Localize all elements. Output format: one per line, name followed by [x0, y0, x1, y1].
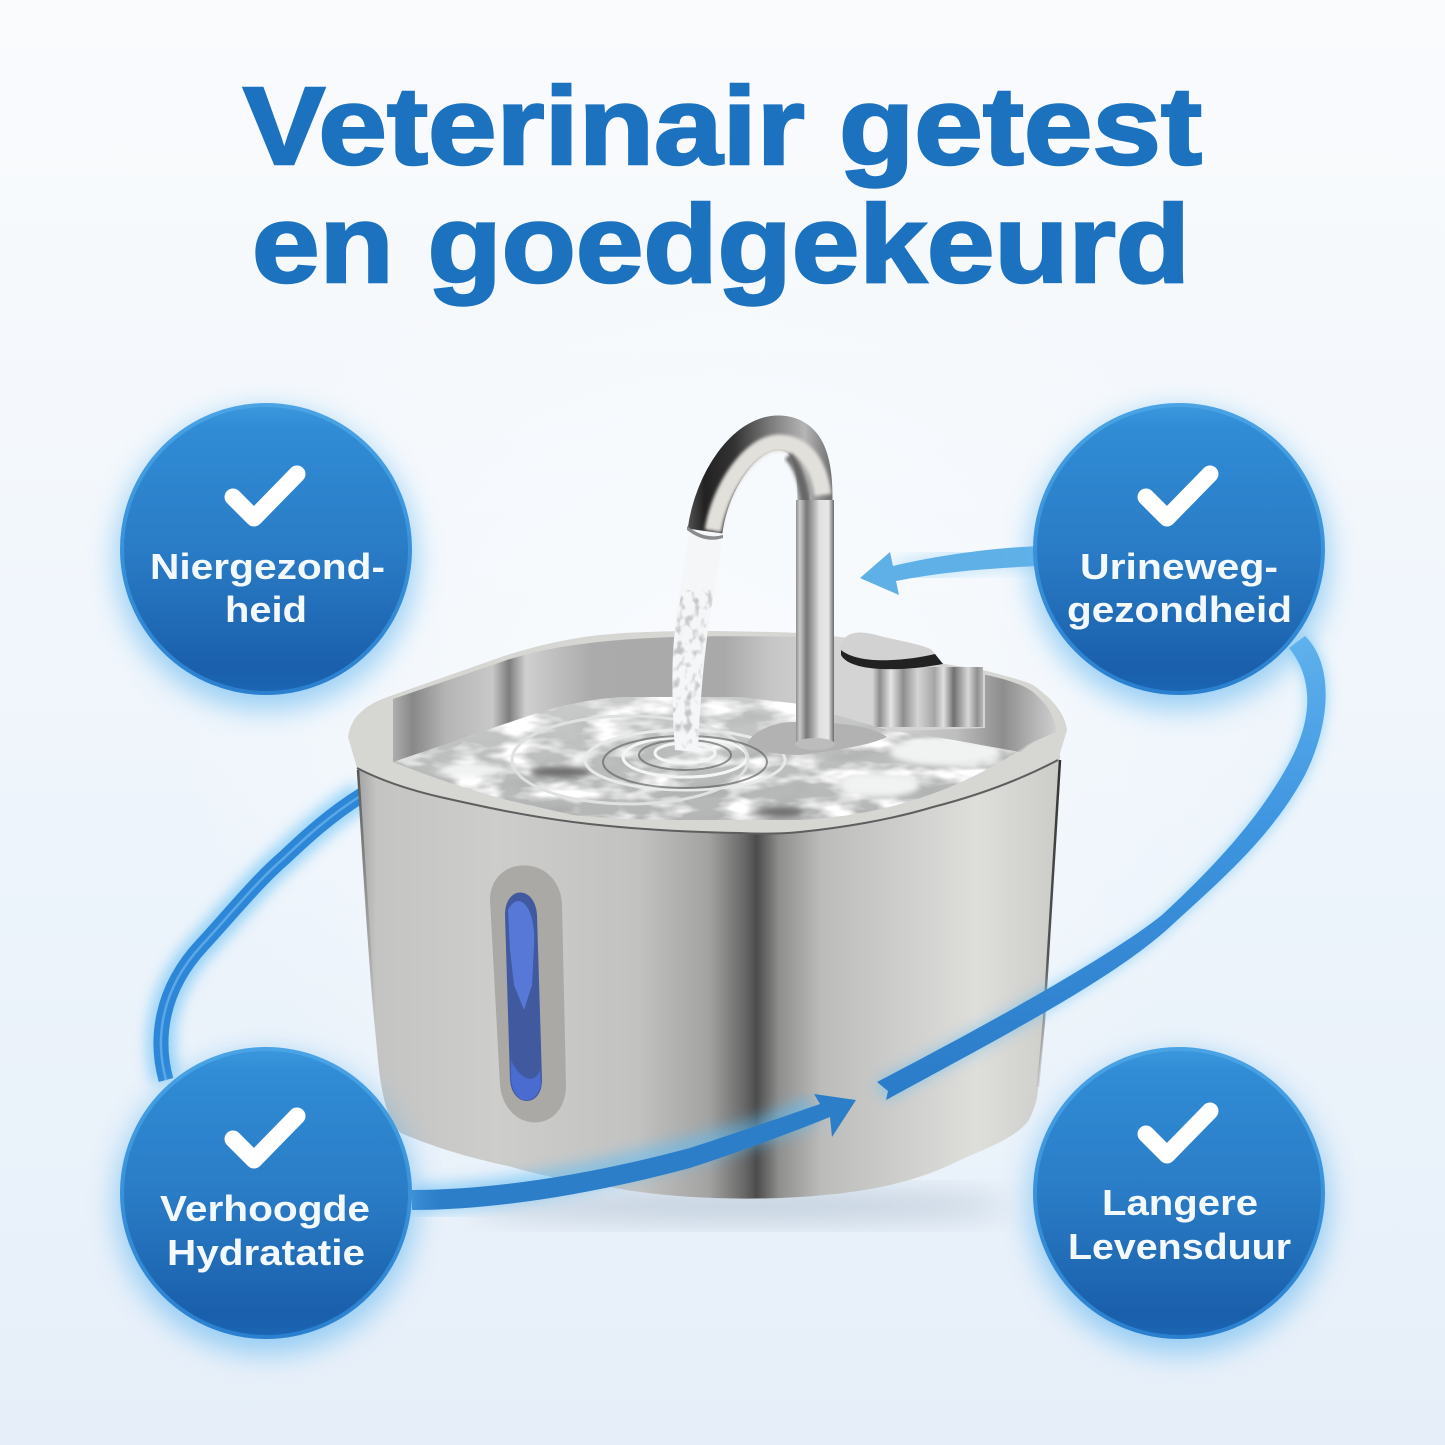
badge: Langere Levensduur: Langere: [1102, 1182, 1258, 1223]
body left edge shadow: [358, 770, 375, 1030]
arrow: top right pointing to faucet: [860, 546, 1040, 595]
dark reflections: [530, 766, 804, 817]
badge: Niergezondheid: Niergezond-: [150, 546, 385, 587]
water surface: [394, 697, 1032, 820]
badge: Urineweggezondheid: [1029, 405, 1329, 710]
faucet base disc: [747, 722, 887, 755]
faucet tube: [796, 500, 834, 743]
faucet collar: [795, 738, 835, 750]
outlet housing: [835, 655, 985, 732]
falling water stream: [672, 534, 722, 752]
icon: check: [1146, 474, 1210, 518]
rim lower edge line: [357, 760, 1058, 834]
faucet spout lip: [687, 526, 723, 540]
badge: Niergezondheid: heid: [225, 589, 307, 630]
title: Veterinair getest: [243, 65, 1202, 188]
arrow: left arc behind fountain: [161, 795, 362, 1080]
badge: Langere Levensduur: [1029, 1049, 1329, 1354]
large reflections on the right: [440, 738, 1000, 797]
badge: Verhoogde Hydratatie: [116, 1049, 416, 1354]
badge: Verhoogde Hydratatie: Verhoogde: [160, 1188, 370, 1229]
arrow: lower curve from Hydratatie to fountain: [412, 1094, 856, 1210]
fountain body: [357, 755, 1060, 1199]
icon: check: [233, 474, 297, 518]
rim: [348, 631, 1067, 834]
icon: check: [233, 1116, 297, 1160]
badge: Niergezondheid: [116, 405, 416, 710]
product: stainless steel fountain: [348, 433, 1067, 1199]
title: en goedgekeurd: [252, 183, 1190, 306]
title: [243, 65, 1202, 306]
badge: Verhoogde Hydratatie: Hydratatie: [167, 1232, 365, 1273]
body right edge shadow: [1038, 760, 1060, 1087]
badge: Urineweggezondheid: Urineweg-: [1080, 546, 1278, 587]
ripple rings: [512, 716, 785, 804]
arrow: long curve from Urineweggezondheid: [877, 636, 1326, 1100]
inner bowl wall: [393, 636, 1056, 762]
water level window: [490, 865, 566, 1122]
soft floor shadow: [470, 1190, 1010, 1222]
faucet arch: [705, 433, 823, 531]
outlet ribs: [873, 667, 983, 727]
badge: Urineweggezondheid: gezondheid: [1067, 589, 1292, 630]
button cap: [840, 633, 943, 669]
badge: Langere Levensduur: Levensduur: [1068, 1226, 1291, 1267]
icon: check: [1146, 1111, 1210, 1155]
